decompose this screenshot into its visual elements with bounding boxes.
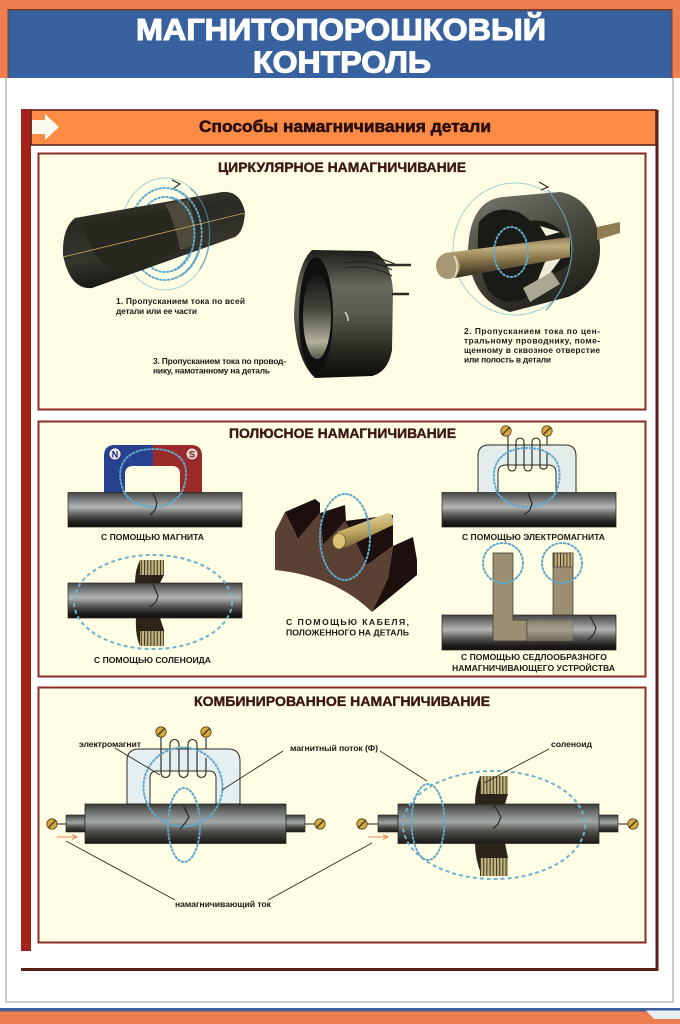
caption 1: 1. Пропусканием тока по всей [116,296,245,306]
heading: combined: КОМБИНИРОВАННОЕ НАМАГНИЧИВАНИЕ [194,694,490,709]
heading: pole: ПОЛЮСНОЕ НАМАГНИЧИВАНИЕ [229,426,456,441]
illustration: permanent magnet: N [112,450,118,460]
panel: combined magnetization [38,688,646,942]
panel: pole magnetization [38,422,646,676]
leader lines [66,748,549,900]
caption 3 [153,356,286,376]
caption: cable: С ПОМОЩЬЮ КАБЕЛЯ, [286,617,409,627]
heading: circular: ЦИРКУЛЯРНОЕ НАМАГНИЧИВАНИЕ [218,160,466,175]
arrow: current left [57,834,77,840]
footer band [0,1008,680,1024]
caption: saddle device: НАМАГНИЧИВАЮЩЕГО УСТРОЙСТВА [452,662,616,673]
caption 2: или полость в детали [464,354,551,364]
label: solenoid: соленоид [551,739,592,749]
caption: solenoid: С ПОМОЩЬЮ СОЛЕНОИДА [94,655,212,665]
illustration: cylinder with current through part [63,178,245,290]
illustration: permanent magnet [68,445,242,527]
caption: cable [286,617,409,638]
illustration: cable on toothed part [275,494,417,612]
caption: electromagnet: С ПОМОЩЬЮ ЭЛЕКТРОМАГНИТА [462,532,606,542]
title line 1: МАГНИТОПОРОШКОВЫЙ [136,11,546,47]
outer frame [21,110,657,970]
caption: saddle device [452,652,616,673]
caption: saddle device: С ПОМОЩЬЮ СЕДЛООБРАЗНОГО [461,652,607,662]
caption 1 [116,296,245,316]
caption 1: детали или ее части [116,306,197,316]
illustration: saddle device [442,543,616,650]
publisher logo [646,1010,680,1019]
diagram: electromagnet with part [47,727,325,862]
illustration: ring with wound conductor [294,250,411,378]
left frame bar [21,109,31,951]
caption 2 [464,326,600,364]
subtitle banner [31,110,656,145]
illustration: solenoid [68,555,242,649]
icon: white arrow [32,114,59,140]
caption: magnet: С ПОМОЩЬЮ МАГНИТА [101,532,205,542]
label: magnetizing current: намагничивающий ток [175,899,272,909]
illustration: permanent magnet: S [189,450,195,460]
arrow: current right [368,834,388,840]
label: electromagnet: электромагнит [79,739,142,749]
illustration: electromagnet [442,426,616,527]
caption 2: тральному проводнику, поме- [464,336,600,346]
caption 2: щенному в сквозное отверстие [464,345,600,355]
caption 3: 3. Пропусканием тока по провод- [153,356,286,366]
panel: circular magnetization [38,154,646,410]
caption: cable: ПОЛОЖЕННОГО НА ДЕТАЛЬ [286,628,409,638]
title line 2: КОНТРОЛЬ [253,46,431,80]
illustration: ring with central conductor [436,182,620,315]
diagram: solenoid with part [357,771,638,879]
caption 2: 2. Пропусканием тока по цен- [464,326,600,336]
header band with title [0,0,680,80]
caption 3: нику, намотанному на деталь [153,366,270,376]
label: magnetic flux: магнитный поток (Ф) [290,743,378,753]
subtitle text: Способы намагничивания детали [199,118,491,136]
